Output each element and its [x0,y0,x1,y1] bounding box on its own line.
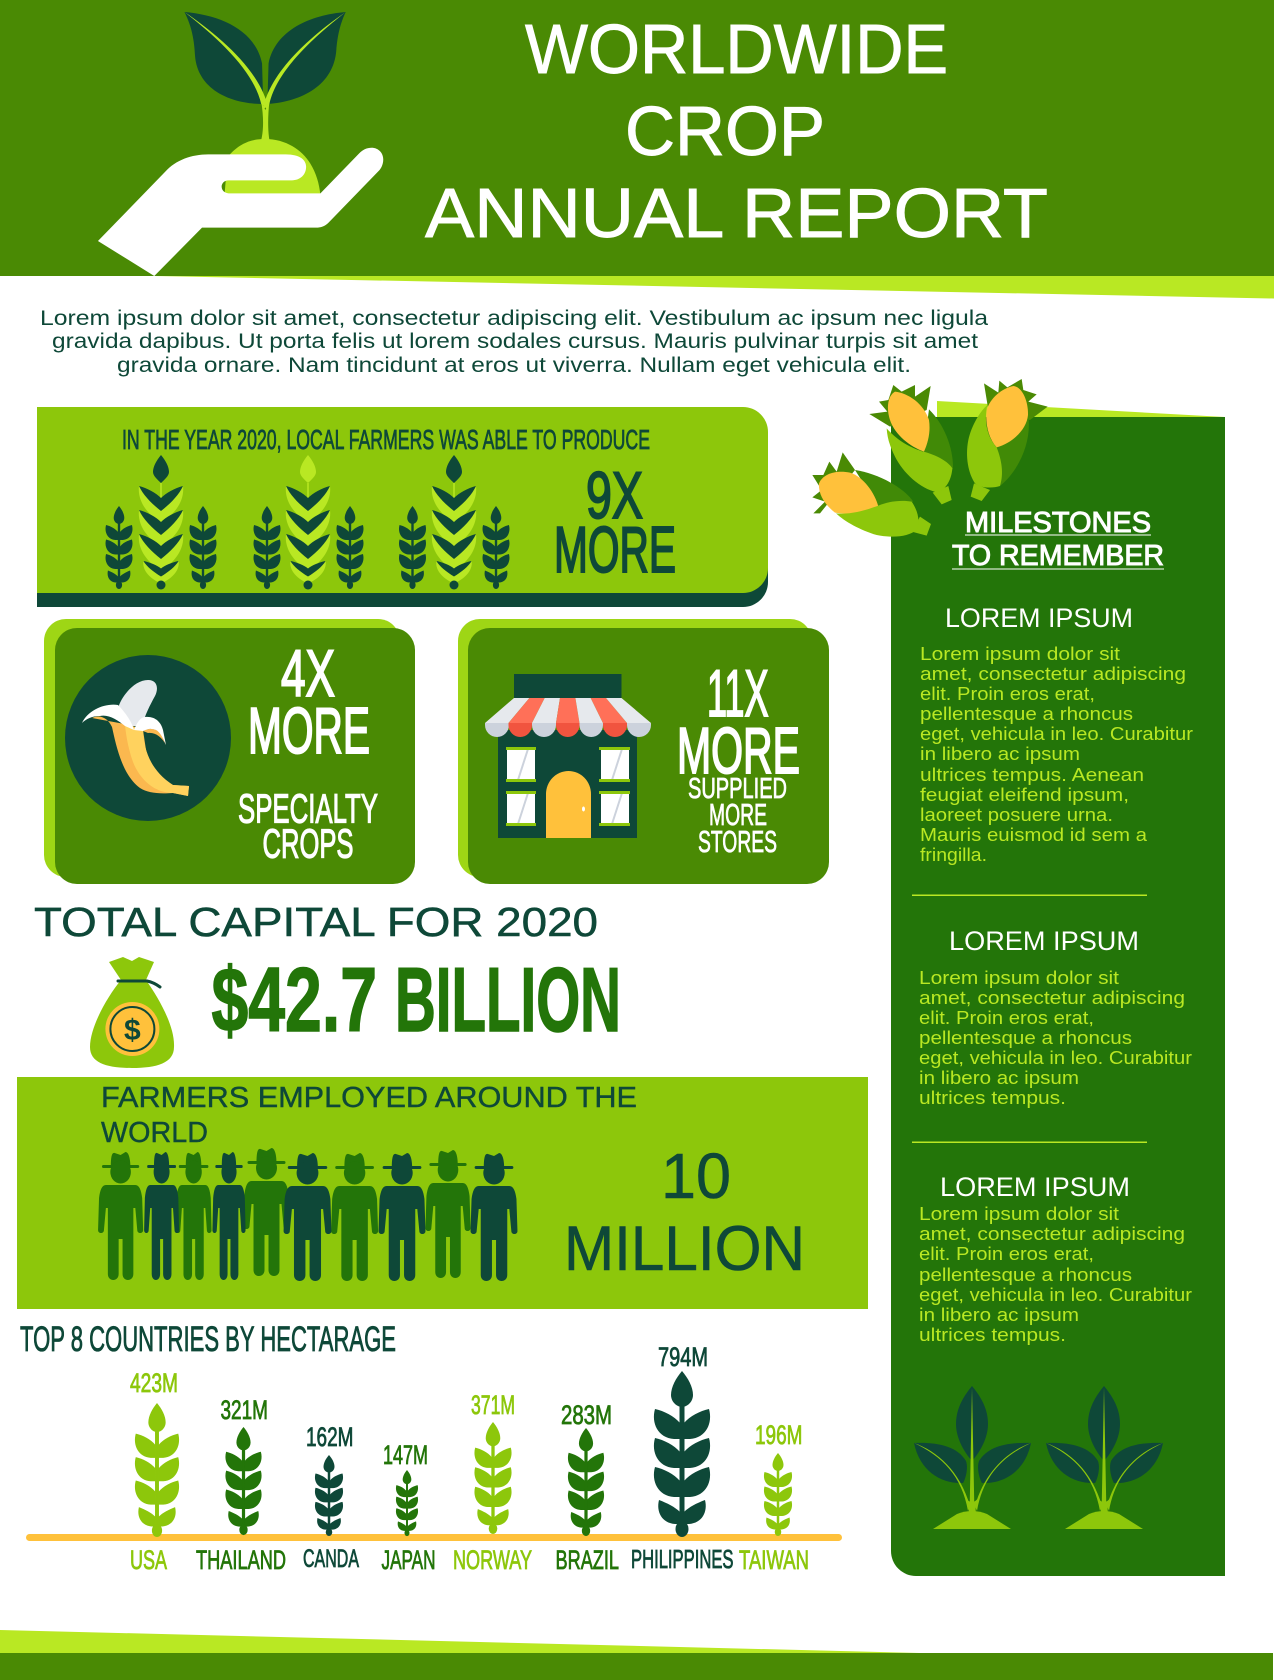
stat: 11x more [677,656,800,859]
stat: 11x more: STORES [698,824,777,859]
panel: 4x specialty crops [44,619,415,884]
sidebar heading [952,507,1164,572]
milestone one [920,603,1193,865]
milestone one: ultrices tempus. Aenean [920,764,1144,785]
bar: Taiwan: TAIWAN [739,1545,809,1575]
stat: 4x more: 4X [281,636,335,710]
stat: 9x more: 9X [586,458,643,532]
icon: money bag: $ [124,1014,141,1047]
intro paragraph: gravida dapibus. Ut porta felis ut lorem sodales cursus. Mauris pulvinar turpis sit amet [52,330,978,353]
stat: 4x more: SPECIALTY [238,786,378,832]
bar: Norway: 371M [471,1390,515,1420]
stat: 11x more: SUPPLIED [688,773,787,805]
milestone three: in libero ac ipsum [919,1304,1079,1325]
milestone one: Lorem ipsum dolor sit [920,643,1120,664]
header band [0,0,1274,298]
bar: Brazil: BRAZIL [556,1545,619,1575]
milestone three [919,1172,1192,1345]
title: WORLDWIDE [525,10,948,88]
chart: hectarage by country [26,1342,842,1575]
stat: 10 million: 10 [661,1140,731,1212]
intro paragraph: gravida ornare. Nam tincidunt at eros ut viverra. Nullam eget vehicula elit. [117,354,911,377]
stat: 4x more [238,636,378,866]
bar: Canda [303,1422,359,1573]
bar: Japan: JAPAN [382,1545,436,1575]
milestone one: eget, vehicula in leo. Curabitur [920,723,1193,744]
stat: 4x more: MORE [248,694,370,767]
bar: Philippines: PHILIPPINES [631,1544,734,1574]
title: ANNUAL REPORT [425,174,1048,252]
panel: farmers employed [17,1077,868,1309]
milestone three: LOREM IPSUM [940,1172,1130,1202]
intro paragraph [40,307,988,377]
milestone three: eget, vehicula in leo. Curabitur [919,1284,1192,1305]
milestone three: pellentesque a rhoncus [919,1264,1132,1285]
chart heading: TOP 8 COUNTRIES BY HECTARAGE [20,1320,396,1359]
icon: shop [485,674,651,838]
stat: 4x more: CROPS [262,820,354,866]
milestone one: pellentesque a rhoncus [920,703,1133,724]
bar: Philippines [631,1342,734,1574]
stat: 10 million [564,1140,805,1284]
milestone two [919,926,1192,1108]
sidebar heading: TO REMEMBER [952,540,1164,572]
bar: Taiwan: 196M [755,1420,802,1450]
capital figure: BILLION [395,950,621,1051]
milestone one: amet, consectetur adipiscing [920,663,1186,684]
milestone three: amet, consectetur adipiscing [919,1223,1185,1244]
bar: Canda: 162M [306,1422,354,1452]
panel: 9x more production [37,407,768,607]
icon: farmers row [98,1148,517,1281]
panel: 11x more stores [458,619,829,884]
title: CROP [625,92,825,170]
bar: Japan: 147M [383,1440,428,1470]
milestone two: amet, consectetur adipiscing [919,987,1185,1008]
bar: Thailand [196,1395,286,1575]
bar: Philippines: 794M [658,1342,708,1372]
bar: Thailand: THAILAND [196,1545,286,1575]
sidebar heading: MILESTONES [965,507,1151,539]
milestone three: Lorem ipsum dolor sit [919,1203,1119,1224]
bar: USA: USA [130,1545,167,1575]
milestone two: pellentesque a rhoncus [919,1027,1132,1048]
icon: banana [65,655,231,821]
panel: milestones sidebar [812,379,1225,1576]
bar: Norway: NORWAY [453,1545,532,1575]
milestone one: feugiat eleifend ipsum, [920,784,1129,805]
milestone one: elit. Proin eros erat, [920,683,1095,704]
milestone two: LOREM IPSUM [949,926,1139,956]
stat: 11x more: 11X [707,656,768,730]
title [425,10,1048,252]
icon: wheat row [106,455,509,590]
icon: seedlings [914,1386,1163,1529]
bar: Canda: CANDA [303,1545,359,1573]
bar: USA: 423M [130,1368,178,1398]
icon: hand holding seedling [98,12,383,276]
milestone two: eget, vehicula in leo. Curabitur [919,1047,1192,1068]
stat: 10 million: MILLION [564,1214,805,1284]
bar: Taiwan [739,1420,809,1575]
milestone two: Lorem ipsum dolor sit [919,967,1119,988]
panel heading [101,1082,637,1149]
bar: Brazil: 283M [561,1400,612,1430]
stat: 11x more: MORE [709,797,767,832]
milestone one: LOREM IPSUM [945,603,1133,633]
bar: Norway [453,1390,532,1575]
footer band [0,1630,1273,1680]
bar: Brazil [556,1400,619,1575]
milestone one: fringilla. [920,844,987,865]
intro paragraph: Lorem ipsum dolor sit amet, consectetur adipiscing elit. Vestibulum ac ipsum nec ligula [40,307,988,330]
stat: 9x more [554,458,676,586]
milestone two: in libero ac ipsum [919,1067,1079,1088]
capital heading: TOTAL CAPITAL FOR 2020 [34,899,598,945]
panel heading: IN THE YEAR 2020, LOCAL FARMERS WAS ABLE TO PRODUCE [122,424,650,455]
icon: money bag [90,957,174,1068]
milestone one: laoreet posuere urna. [920,804,1113,825]
panel heading: FARMERS EMPLOYED AROUND THE [101,1082,637,1114]
milestone one: Mauris euismod id sem a [920,824,1148,845]
milestone one: in libero ac ipsum [920,743,1080,764]
milestone two: ultrices tempus. [919,1087,1066,1108]
bar: USA [130,1368,179,1575]
milestone three: elit. Proin eros erat, [919,1243,1094,1264]
stat: 11x more: MORE [677,714,800,787]
capital figure [212,950,621,1051]
icon: corn cobs [812,379,1048,537]
bar: Thailand: 321M [220,1395,268,1425]
capital figure: $42.7 [212,950,377,1051]
milestone three: ultrices tempus. [919,1324,1066,1345]
milestone two: elit. Proin eros erat, [919,1007,1094,1028]
stat: 9x more: MORE [554,513,676,586]
bar: Japan [382,1440,436,1575]
panel heading: WORLD [101,1117,208,1149]
